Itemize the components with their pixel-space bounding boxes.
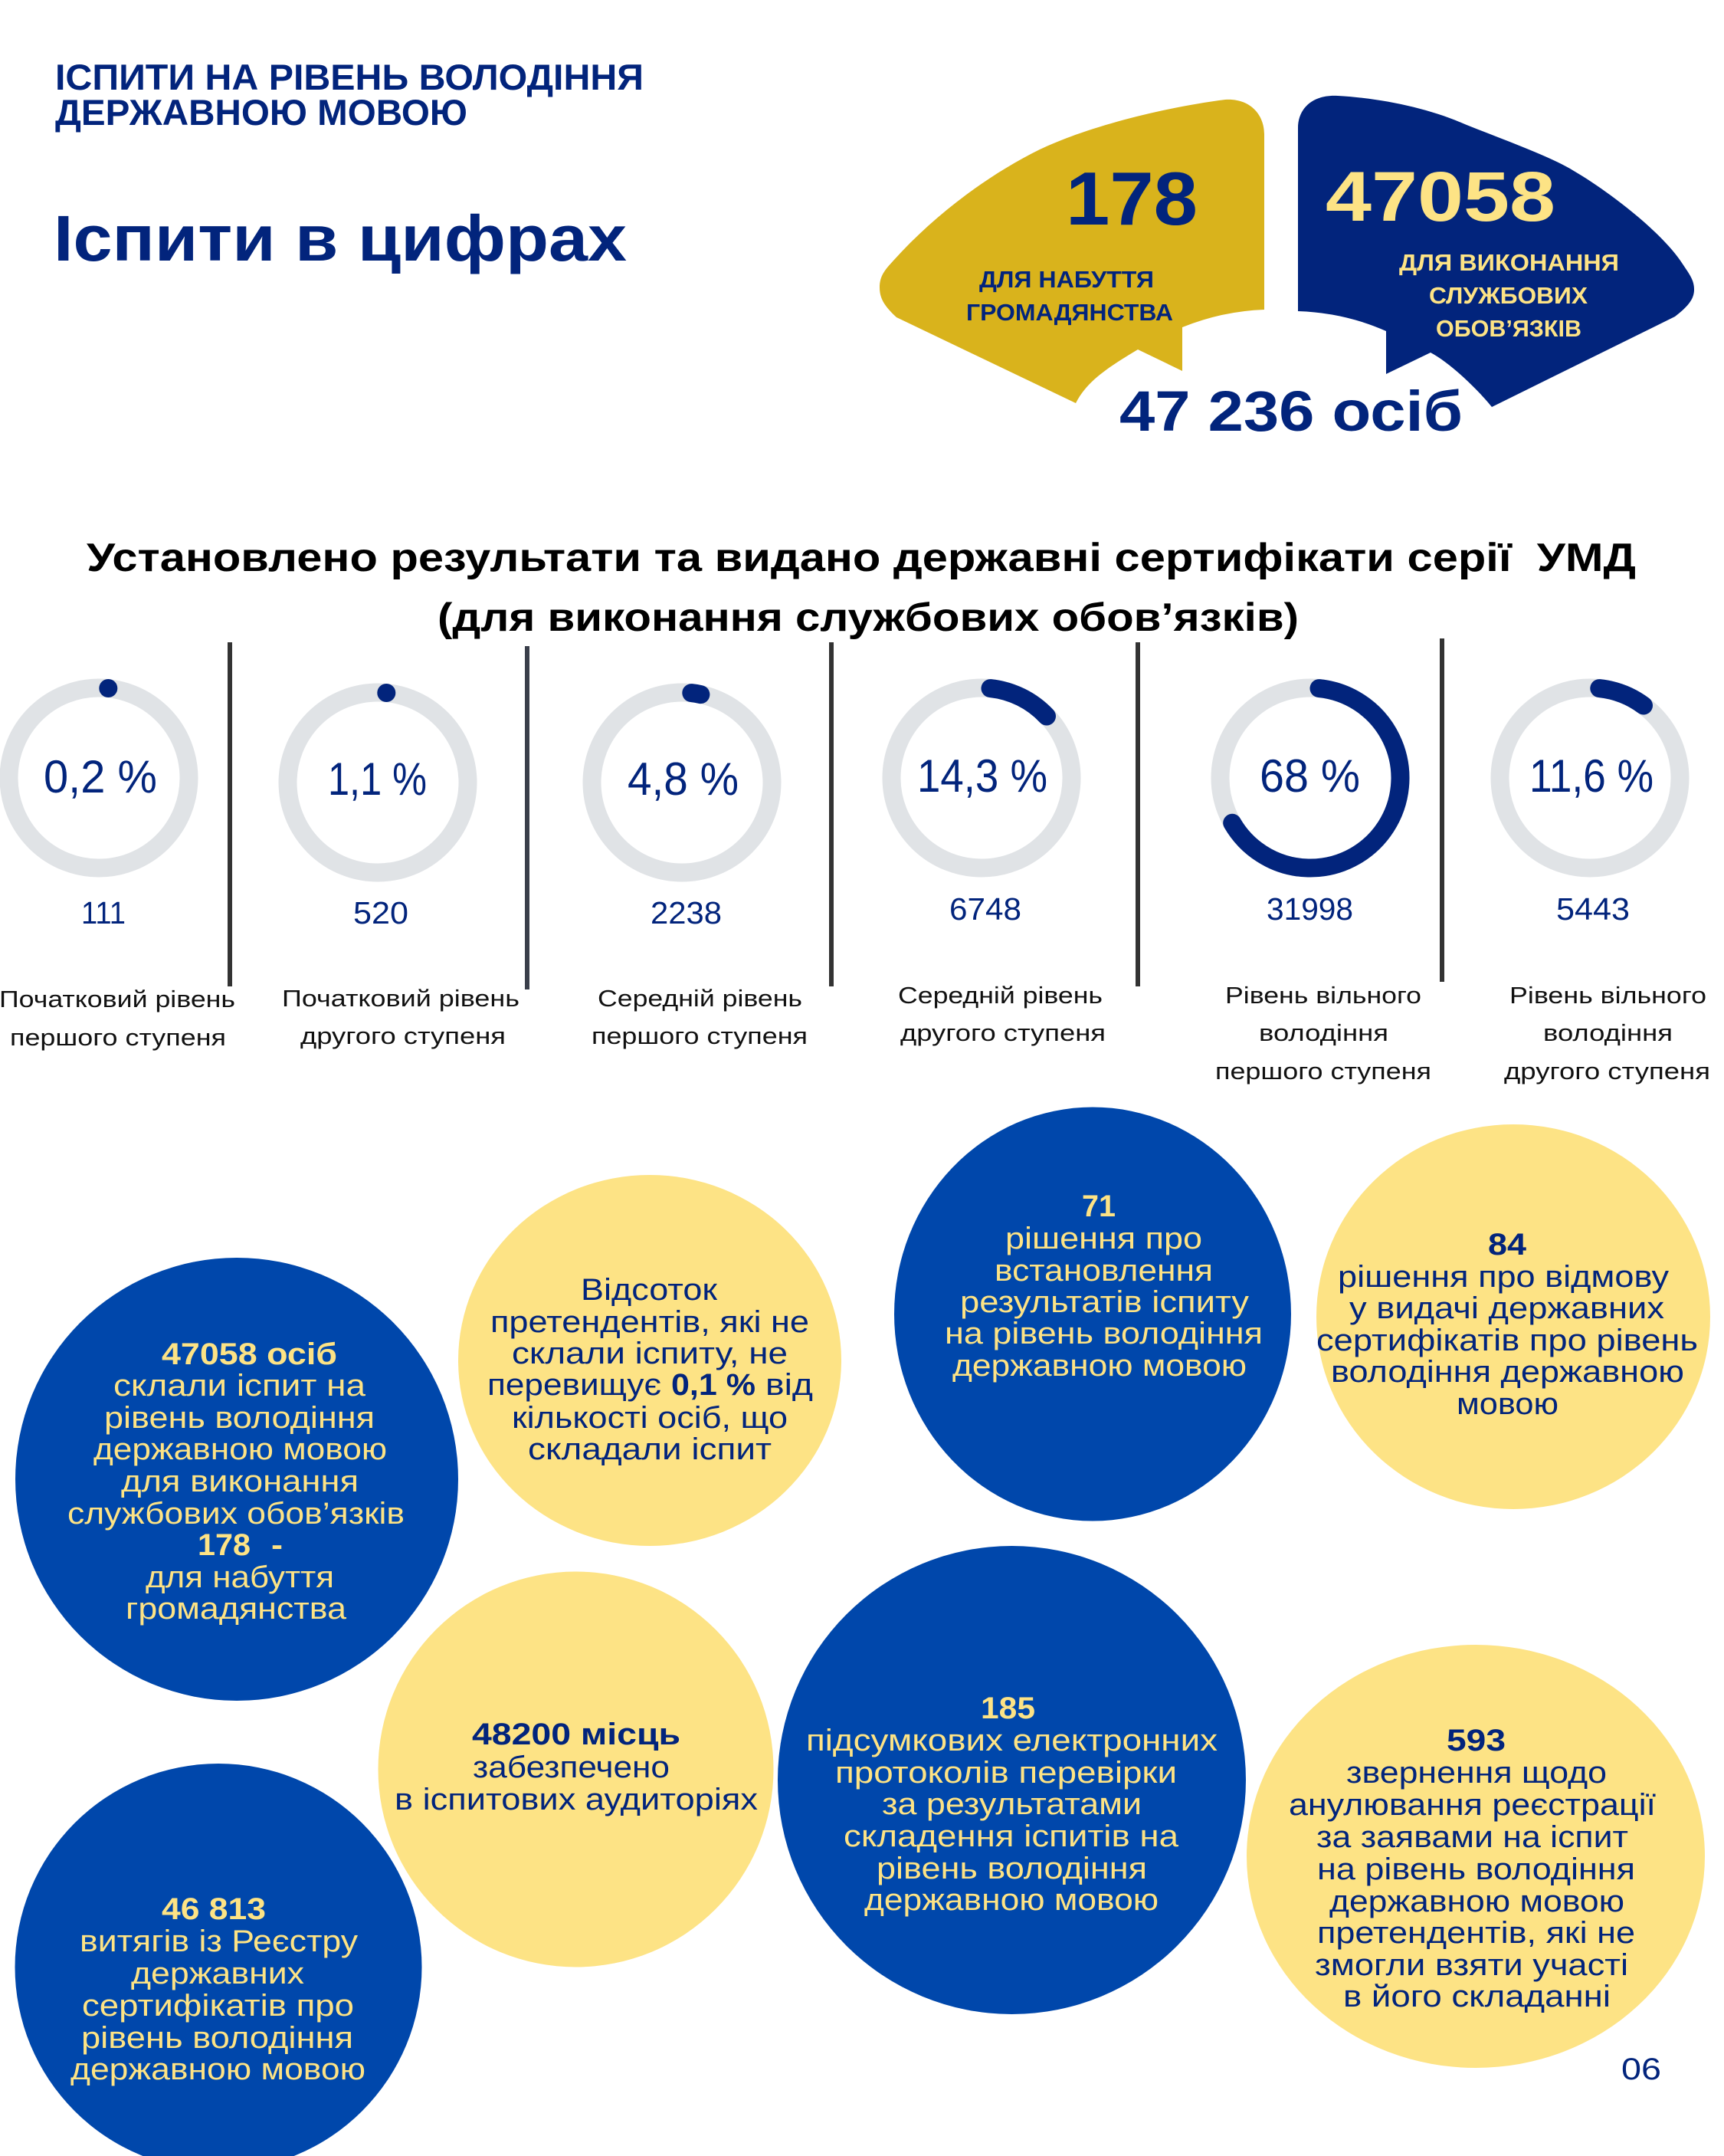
header: section name: ІСПИТИ НА РІВЕНЬ ВОЛОДІННЯ bbox=[55, 57, 644, 97]
section heading: certificates: Установлено результати та видано державні сертифікати серії УМД bbox=[87, 536, 1636, 580]
donut: 14,3 % bbox=[892, 688, 1106, 1046]
bubble: 71 decisions: встановлення bbox=[995, 1254, 1213, 1288]
bubble: 593 appeals: змогли взяти участі bbox=[1315, 1948, 1628, 1982]
bubble: 47058 persons: службових обов’язків bbox=[67, 1497, 405, 1531]
donut: 14,3 %: Середній рівень bbox=[898, 982, 1103, 1009]
bubble: 185 protocols: рівень володіння bbox=[877, 1852, 1147, 1885]
bubble: 48200 seats: 48200 місць bbox=[472, 1718, 680, 1751]
bubble: 84 refusals: 84 bbox=[1488, 1228, 1527, 1262]
header: section name: ДЕРЖАВНОЮ МОВОЮ bbox=[55, 92, 467, 133]
bubble: 593 appeals: державною мовою bbox=[1329, 1885, 1624, 1918]
donut: 1,1 %: Початковий рівень bbox=[282, 985, 519, 1012]
bubble: 71 decisions: рішення про bbox=[1005, 1222, 1202, 1255]
bubble: 84 refusals: мовою bbox=[1457, 1387, 1558, 1421]
bubble: share of failed applicants: від bbox=[765, 1368, 813, 1402]
bubble: 593 appeals: анулювання реєстрації bbox=[1289, 1788, 1656, 1822]
donut: 14,3 %: 14,3 % bbox=[917, 750, 1047, 802]
bubble: 84 refusals: рішення про відмову bbox=[1338, 1260, 1669, 1294]
bubble: 47058 persons: для набуття bbox=[146, 1560, 334, 1594]
bubble: 46 813 extracts: 46 813 bbox=[162, 1892, 266, 1926]
donut: 11,6 %: другого ступеня bbox=[1504, 1058, 1710, 1085]
column dividers bbox=[228, 638, 1444, 989]
donut: 14,3 %: 6748 bbox=[949, 891, 1021, 927]
donut: 11,6 % bbox=[1500, 688, 1710, 1085]
bubble: 47058 persons: рівень володіння bbox=[104, 1401, 375, 1435]
bubble: share of failed applicants: претендентів, які не bbox=[490, 1305, 809, 1339]
panel: 178 for citizenship: 178 bbox=[1066, 156, 1198, 241]
bubble: 46 813 extracts: витягів із Реєстру bbox=[80, 1925, 358, 1958]
bubble: 47058 persons: 178 bbox=[198, 1528, 251, 1562]
donut: 0,2 %: 111 bbox=[81, 895, 126, 930]
bubble: 48200 seats bbox=[379, 1571, 774, 1967]
donut: 68 % bbox=[1215, 688, 1431, 1085]
bubble: 46 813 extracts: державних bbox=[131, 1957, 304, 1990]
bubble: 71 decisions: 71 bbox=[1082, 1190, 1116, 1223]
panel: 178 for citizenship: ГРОМАДЯНСТВА bbox=[966, 299, 1173, 326]
donut: 68 %: Рівень вільного bbox=[1225, 982, 1421, 1009]
panel: 178 for citizenship bbox=[880, 100, 1264, 403]
donut: 4,8 %: 4,8 % bbox=[628, 753, 739, 805]
bubble: 71 decisions bbox=[894, 1107, 1291, 1521]
donut: 0,2 % bbox=[0, 679, 235, 1051]
panel: 47058 for official duties: ОБОВ’ЯЗКІВ bbox=[1436, 315, 1581, 342]
bubble: 84 refusals: сертифікатів про рівень bbox=[1316, 1324, 1698, 1357]
section heading: certificates: (для виконання службових обов’язків) bbox=[438, 596, 1299, 640]
bubble: 47058 persons: 47058 осіб bbox=[162, 1337, 337, 1371]
bubble: 71 decisions: на рівень володіння bbox=[945, 1317, 1263, 1350]
page number: 06 bbox=[1621, 2053, 1661, 2086]
bubble: 48200 seats: в іспитових аудиторіях bbox=[395, 1783, 758, 1816]
bubble: share of failed applicants: кількості осіб, що bbox=[512, 1401, 788, 1435]
bubble: 71 decisions: результатів іспиту bbox=[960, 1285, 1249, 1319]
bubble: share of failed applicants bbox=[458, 1175, 841, 1546]
bubble: 185 protocols: 185 bbox=[981, 1692, 1035, 1725]
bubble: 185 protocols bbox=[778, 1546, 1246, 2014]
bubble: 47058 persons: склали іспит на bbox=[113, 1369, 366, 1403]
bubble: 47058 persons: - bbox=[271, 1528, 283, 1562]
panel: 47058 for official duties: 47058 bbox=[1326, 158, 1555, 236]
donut: 1,1 %: другого ступеня bbox=[300, 1022, 506, 1049]
bubble: 593 appeals: в його складанні bbox=[1343, 1980, 1611, 2013]
bubble: share of failed applicants: 0,1 % bbox=[671, 1368, 755, 1402]
bubble: 47058 persons: для виконання bbox=[121, 1465, 359, 1498]
bubble: 593 appeals: 593 bbox=[1447, 1724, 1506, 1757]
bubble: 47058 persons: державною мовою bbox=[93, 1432, 387, 1466]
donut: 0,2 %: Початковий рівень bbox=[0, 986, 235, 1012]
bubble: 47058 persons bbox=[15, 1258, 458, 1701]
bubble: 185 protocols: державною мовою bbox=[864, 1883, 1159, 1917]
bubble: 48200 seats: забезпечено bbox=[473, 1751, 670, 1784]
bubble: 84 refusals: володіння державною bbox=[1331, 1355, 1684, 1389]
bubble: share of failed applicants: Відсоток bbox=[581, 1273, 718, 1307]
bubble: 71 decisions: державною мовою bbox=[952, 1349, 1247, 1383]
donut: 0,2 %: першого ступеня bbox=[10, 1024, 226, 1051]
bubble: 593 appeals: претендентів, які не bbox=[1317, 1916, 1635, 1950]
bubble: 185 protocols: за результатами bbox=[882, 1787, 1142, 1821]
bubble: 185 protocols: протоколів перевірки bbox=[835, 1756, 1177, 1790]
bubble: 593 appeals bbox=[1247, 1645, 1705, 2068]
bubble: 593 appeals: на рівень володіння bbox=[1317, 1852, 1635, 1886]
header: section name bbox=[55, 57, 644, 133]
bubble: 84 refusals bbox=[1316, 1124, 1710, 1509]
bubble: 46 813 extracts: сертифікатів про bbox=[82, 1989, 354, 2023]
donut: 1,1 %: 520 bbox=[353, 895, 408, 930]
bubble: 47058 persons: громадянства bbox=[126, 1592, 347, 1626]
bubble: 84 refusals: у видачі державних bbox=[1349, 1291, 1664, 1325]
donut: 4,8 % bbox=[592, 693, 808, 1049]
title: Іспити в цифрах bbox=[54, 202, 627, 274]
bubble: 185 protocols: підсумкових електронних bbox=[806, 1724, 1218, 1757]
donut: 1,1 % bbox=[282, 684, 519, 1049]
bubble: 593 appeals: за заявами на іспит bbox=[1316, 1820, 1628, 1854]
bubble: share of failed applicants: складали іспит bbox=[528, 1432, 772, 1466]
donut: 68 %: 31998 bbox=[1267, 891, 1353, 927]
donut: 11,6 %: 11,6 % bbox=[1529, 750, 1654, 802]
bubble: 593 appeals: звернення щодо bbox=[1346, 1756, 1607, 1790]
total number of persons: 47 236 осіб bbox=[1119, 379, 1463, 443]
donut: 68 %: 68 % bbox=[1260, 750, 1360, 802]
panel: 47058 for official duties: ДЛЯ ВИКОНАННЯ bbox=[1399, 249, 1619, 276]
panel: 47058 for official duties bbox=[1298, 96, 1694, 407]
donut: 1,1 %: 1,1 % bbox=[328, 753, 427, 805]
donut: 11,6 %: Рівень вільного bbox=[1509, 982, 1706, 1009]
donut: 14,3 %: другого ступеня bbox=[900, 1019, 1106, 1046]
donut: 4,8 %: Середній рівень bbox=[598, 985, 802, 1012]
donut: 11,6 %: 5443 bbox=[1556, 891, 1630, 927]
section heading: certificates bbox=[87, 536, 1636, 640]
bubble: 46 813 extracts: державною мовою bbox=[70, 2053, 365, 2086]
donut: 4,8 %: 2238 bbox=[651, 895, 722, 930]
bubble: 185 protocols: складення іспитів на bbox=[844, 1820, 1179, 1853]
bubble: 46 813 extracts: рівень володіння bbox=[81, 2021, 353, 2055]
panel: 178 for citizenship: ДЛЯ НАБУТТЯ bbox=[979, 266, 1154, 293]
donut: 68 %: володіння bbox=[1259, 1019, 1388, 1046]
donut: 68 %: першого ступеня bbox=[1215, 1058, 1431, 1085]
donut: 4,8 %: першого ступеня bbox=[592, 1022, 808, 1049]
bubble: 46 813 extracts bbox=[15, 1764, 421, 2156]
panel: 47058 for official duties: СЛУЖБОВИХ bbox=[1429, 282, 1588, 309]
bubble: share of failed applicants: склали іспиту, не bbox=[512, 1337, 788, 1370]
donut: 11,6 %: володіння bbox=[1543, 1019, 1673, 1046]
bubble: share of failed applicants: перевищує bbox=[487, 1368, 661, 1402]
donut: 0,2 %: 0,2 % bbox=[44, 751, 157, 802]
